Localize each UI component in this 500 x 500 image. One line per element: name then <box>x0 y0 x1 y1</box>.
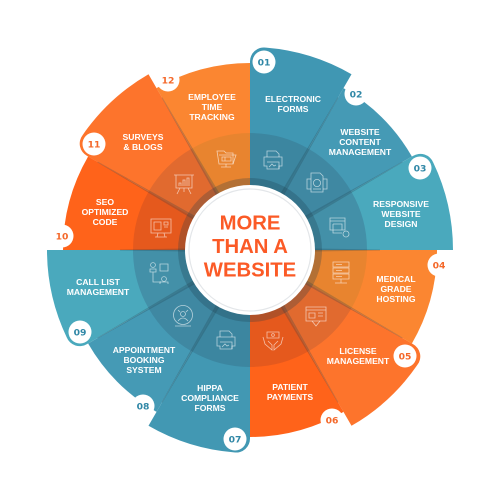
wedge 05: license management <box>199 250 425 439</box>
title: more than a website: WEBSITE <box>204 260 296 282</box>
badge 10 <box>50 224 74 248</box>
icon: monitor with code <box>151 219 171 237</box>
badge 02 <box>344 82 368 106</box>
wedge 06: patient payments <box>250 250 344 437</box>
title: more than a website: MORE <box>220 212 280 234</box>
label 07: HIPPA <box>197 383 223 393</box>
icon: website with gear <box>330 218 349 237</box>
label 09: MANAGEMENT <box>67 287 130 297</box>
label 12: TIME <box>202 102 223 112</box>
badge 04: 04 <box>433 260 445 272</box>
badge 07 <box>224 428 246 450</box>
label 03: DESIGN <box>385 219 417 229</box>
badge 08: 08 <box>137 402 149 412</box>
label 07: COMPLIANCE <box>181 393 239 403</box>
icon: server stack <box>333 262 349 283</box>
label 02: MANAGEMENT <box>329 147 392 157</box>
label 04: HOSTING <box>376 294 416 304</box>
badge 05: 05 <box>399 352 411 362</box>
badge 03 <box>408 156 432 180</box>
badge 01: 01 <box>258 58 270 68</box>
label 02: CONTENT <box>339 137 382 147</box>
icon: presentation board <box>174 175 194 194</box>
badge 12 <box>156 68 180 92</box>
badge 01 <box>252 50 276 74</box>
icon: content document <box>307 173 327 192</box>
label 11: & BLOGS <box>123 142 163 152</box>
badge 08 <box>132 394 154 418</box>
number badges <box>50 50 450 450</box>
icon: call list people <box>150 263 168 284</box>
label 04: GRADE <box>380 284 412 294</box>
label 08: APPOINTMENT <box>113 345 176 355</box>
label 02: WEBSITE <box>340 127 380 137</box>
badge 11: 11 <box>88 140 100 150</box>
wedge 11: surveys and blogs <box>75 61 301 250</box>
label 10: SEO <box>96 197 114 207</box>
label 05: LICENSE <box>339 346 377 356</box>
label 09: CALL LIST <box>76 277 121 287</box>
badge 10: 10 <box>56 232 68 242</box>
center circle with title <box>178 178 322 322</box>
label 06: PATIENT <box>272 382 308 392</box>
badge 02: 02 <box>350 90 362 100</box>
label 03: RESPONSIVE <box>373 199 429 209</box>
badge 12: 12 <box>162 76 174 86</box>
badge 09 <box>68 320 92 344</box>
wedge 09: call list management <box>24 162 250 351</box>
label 12: EMPLOYEE <box>188 92 236 102</box>
wedge 10: seo optimized code <box>63 156 250 250</box>
badge 11 <box>82 132 106 156</box>
label 04: MEDICAL <box>376 274 416 284</box>
badge 06: 06 <box>326 416 338 426</box>
label 11: SURVEYS <box>123 132 164 142</box>
icon: hands holding money <box>263 332 283 350</box>
panel: wheel wedges <box>24 47 476 453</box>
title: more than a website: THAN A <box>212 236 288 258</box>
label 05: MANAGEMENT <box>327 356 390 366</box>
icon: license browser <box>306 307 326 326</box>
badge 09: 09 <box>74 328 86 338</box>
label 03: WEBSITE <box>381 209 421 219</box>
wedge 12: employee time tracking <box>156 63 250 250</box>
badge 03: 03 <box>414 164 426 174</box>
icon: booking globe <box>174 306 192 326</box>
label 06: PAYMENTS <box>267 392 313 402</box>
label 01: ELECTRONIC <box>265 94 321 104</box>
wedge 02: website content management <box>250 88 412 250</box>
label 08: BOOKING <box>123 355 165 365</box>
icon: time tracking folder <box>217 151 236 167</box>
label 07: FORMS <box>194 403 226 413</box>
wedge 04: medical grade hosting <box>250 250 437 344</box>
icon: compliance forms <box>217 331 235 349</box>
badge 06 <box>320 408 344 432</box>
wedge 08: appointment booking system <box>88 250 250 412</box>
badge 07: 07 <box>229 434 241 446</box>
wedge 03: responsive website design <box>250 149 476 338</box>
wedge 07: hippa compliance forms <box>148 250 250 453</box>
label 10: CODE <box>93 217 118 227</box>
label 01: FORMS <box>277 104 309 114</box>
label 12: TRACKING <box>189 112 235 122</box>
wedge 01: electronic forms <box>250 47 352 250</box>
badge 04 <box>428 254 450 276</box>
badge 05 <box>394 344 416 368</box>
label 10: OPTIMIZED <box>82 207 128 217</box>
label 08: SYSTEM <box>126 365 162 375</box>
icon: electronic forms <box>264 151 282 169</box>
